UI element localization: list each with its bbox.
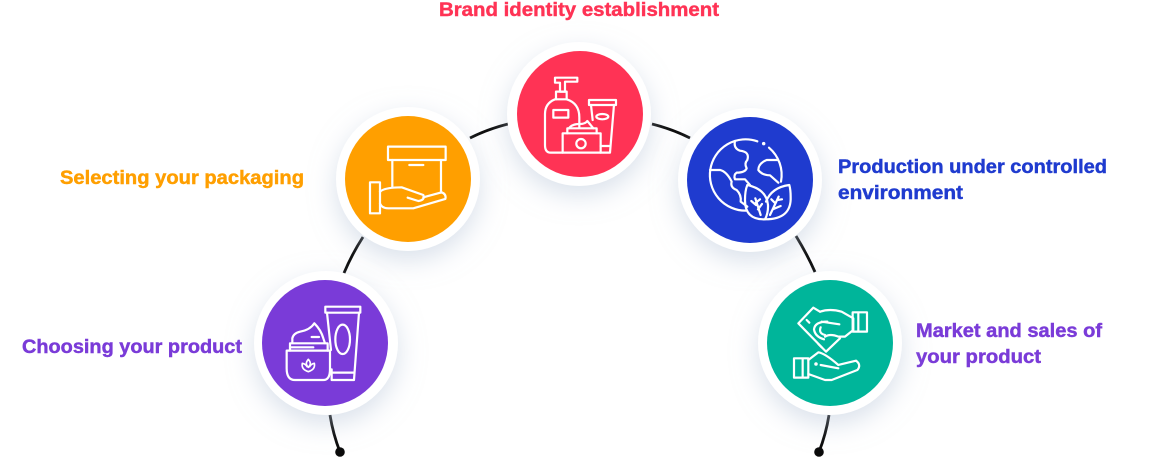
connector: red to blue bbox=[652, 124, 690, 138]
heading: production: Production under controlled bbox=[838, 156, 1107, 178]
icon: globe with leaves bbox=[710, 139, 791, 219]
panel: brand identity circle bbox=[507, 42, 651, 186]
panel: choosing product circle bbox=[254, 271, 398, 415]
start connector with dot bbox=[330, 415, 345, 457]
panel: production circle bbox=[678, 108, 822, 252]
heading: choosing product: Choosing your product bbox=[22, 336, 243, 358]
heading: packaging: Selecting your packaging bbox=[60, 167, 304, 189]
heading: production bbox=[838, 156, 1107, 204]
panel: packaging circle bbox=[336, 107, 480, 251]
icon: cream jar and tube bbox=[287, 307, 360, 380]
heading: market and sales: your product bbox=[916, 346, 1042, 368]
panel: market and sales circle bbox=[758, 271, 902, 415]
icon: hand holding box bbox=[370, 147, 446, 213]
end connector with dot bbox=[814, 415, 829, 457]
icon: hands exchanging money bbox=[794, 308, 867, 380]
connector: purple to orange bbox=[344, 237, 363, 273]
icon: cosmetics bottles bbox=[545, 78, 616, 153]
connector: blue to teal bbox=[796, 236, 815, 272]
heading: production: environment bbox=[838, 182, 964, 204]
connector: orange to red bbox=[470, 124, 508, 138]
heading: market and sales bbox=[916, 320, 1103, 368]
heading: market and sales: Market and sales of bbox=[916, 320, 1103, 342]
